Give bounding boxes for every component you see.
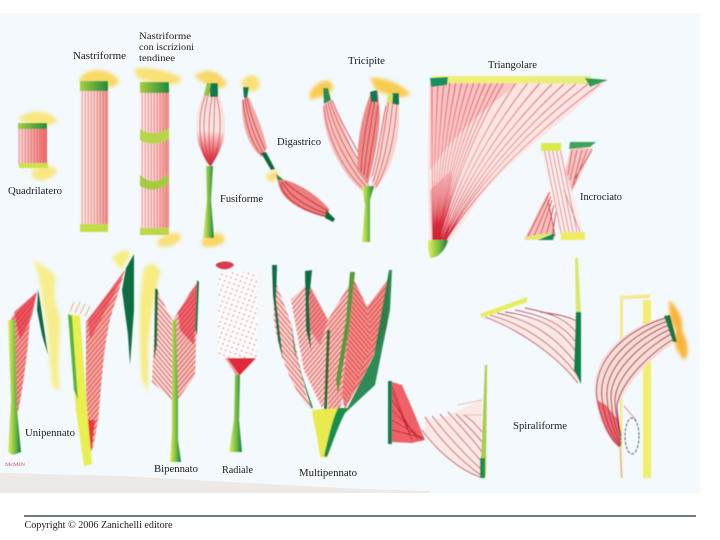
label: Incrociato: Incrociato xyxy=(580,192,622,203)
bottom grey wedge of the scanned page xyxy=(0,473,430,493)
label: Nastriforme con iscrizioni tendinee: Nastriforme xyxy=(139,31,191,42)
muscle: triangolare xyxy=(428,76,608,258)
muscle: fusiforme xyxy=(194,71,227,247)
label: Nastriforme con iscrizioni tendinee xyxy=(139,31,194,64)
muscle: spiraliforme destro xyxy=(595,294,688,478)
muscle: tricipite xyxy=(310,78,410,242)
label: Fusiforme: Fusiforme xyxy=(220,194,264,205)
label: Spiraliforme: Spiraliforme xyxy=(513,421,568,432)
copyright footer: Copyright © 2006 Zanichelli editore xyxy=(24,520,173,531)
label: Nastriforme con iscrizioni tendinee: tendinee xyxy=(139,54,175,64)
muscle: unipennato sinistro xyxy=(8,261,60,455)
muscle: nastriforme con iscrizioni tendinee xyxy=(134,68,181,247)
muscle: incrociato xyxy=(524,142,596,240)
label: Quadrilatero: Quadrilatero xyxy=(8,186,62,197)
label: Nastriforme con iscrizioni tendinee: con iscrizioni xyxy=(139,43,194,53)
muscle: radiale xyxy=(216,261,257,452)
label: Nastriforme: Nastriforme xyxy=(73,51,127,62)
muscle: quadrilatero xyxy=(18,112,57,180)
footer rule xyxy=(24,515,696,517)
muscle: unipennato destro xyxy=(68,251,134,466)
muscle: multipennato xyxy=(272,265,392,458)
small red artist signature: McMIN xyxy=(5,463,25,468)
label: Digastrico: Digastrico xyxy=(277,137,321,148)
label: Multipennato: Multipennato xyxy=(299,468,357,479)
label: Radiale: Radiale xyxy=(222,465,254,476)
label: Bipennato: Bipennato xyxy=(154,464,198,475)
label: Tricipite: Tricipite xyxy=(348,56,386,67)
muscle: spiraliforme superiore xyxy=(480,258,581,384)
muscle: digastrico xyxy=(241,75,335,222)
muscle: spiraliforme inferiore xyxy=(388,365,487,478)
label: Unipennato: Unipennato xyxy=(25,428,75,439)
muscle: nastriforme xyxy=(80,70,119,232)
label: Triangolare: Triangolare xyxy=(488,60,538,71)
muscle: bipennato xyxy=(140,265,199,462)
